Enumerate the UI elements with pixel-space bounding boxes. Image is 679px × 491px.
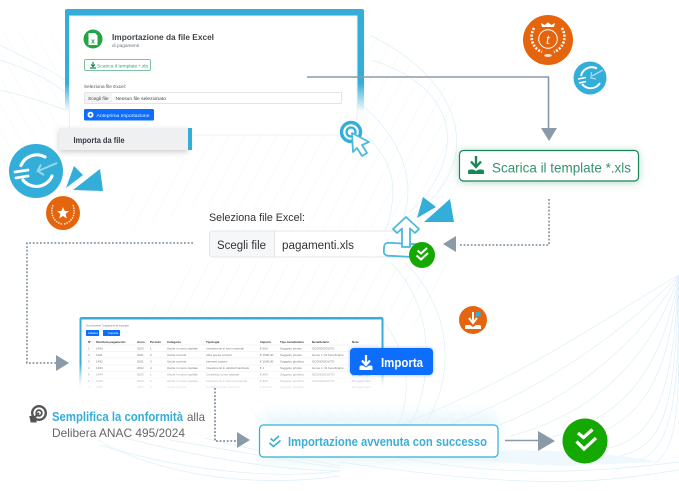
table contents: Soggetto giuridico	[280, 372, 304, 376]
arrow: dotted from download to file input	[443, 199, 549, 252]
icon: orange crest with t	[523, 15, 573, 65]
table contents: Soggetto giuridico	[280, 379, 304, 383]
table contents: Uscite correnti	[167, 385, 187, 389]
table contents: 4	[88, 366, 90, 370]
table contents: Soggetto privato	[280, 346, 302, 350]
table contents: Altre spese correnti	[206, 353, 232, 357]
table contents: Importa	[108, 331, 119, 335]
table contents: Beneficiario	[312, 340, 329, 344]
file input	[84, 92, 342, 104]
table contents: 1493	[96, 366, 103, 370]
table contents: 1495	[96, 379, 103, 383]
table contents: € 900,00	[260, 385, 272, 389]
panel: Excel import screen	[65, 9, 364, 135]
table contents: 1494	[96, 372, 103, 376]
tab: Importa da file	[59, 128, 192, 150]
table contents: Home c. 01 beneficiario	[312, 366, 344, 370]
panel: payments table	[80, 317, 384, 395]
panel inner area	[70, 16, 357, 135]
icon: orange crest with t: t	[546, 32, 551, 48]
table contents: Soggetto giuridico	[280, 360, 304, 364]
icon: import	[360, 355, 372, 370]
button: preview import: Anteprima Importazione	[96, 113, 150, 119]
message: import successful	[260, 425, 498, 457]
button: Importa	[350, 348, 433, 375]
table contents: 5	[88, 372, 90, 376]
button: preview import	[84, 109, 154, 120]
table contents: Investimenti in beni materiali	[206, 346, 244, 350]
button: Importa: Importa	[381, 355, 424, 370]
icon: euro with arrow	[9, 144, 63, 198]
table contents: 7	[88, 385, 90, 389]
table contents: Tipologia	[206, 340, 220, 344]
table contents: Periodo	[150, 340, 161, 344]
table contents: Uscite correnti	[167, 360, 187, 364]
icon: small euro badge	[574, 62, 606, 94]
icon: click cursor	[342, 122, 369, 156]
table contents: 2020	[137, 346, 144, 350]
table contents: Uscite in conto capitale	[167, 346, 198, 350]
message: import successful: Importazione avvenuta con successo	[288, 435, 487, 449]
tab: Importa da file: Importa da file	[74, 135, 125, 145]
table contents: Da aggiornare	[352, 372, 371, 376]
table contents: Sono presenti 7 pagamenti da importare	[86, 324, 129, 328]
table contents: 1	[150, 346, 152, 350]
table contents: Uscite in conto capitale	[167, 372, 198, 376]
panel contents	[84, 30, 342, 120]
table contents: Interessi passivi	[206, 360, 228, 364]
table contents: 2021	[137, 353, 144, 357]
label: Seleziona file Excel: Seleziona file Excel:	[209, 212, 305, 224]
icon: Excel file: x	[91, 38, 95, 46]
table contents: 2	[150, 379, 152, 383]
table contents: 2023	[137, 372, 144, 376]
icon: green check small	[409, 242, 435, 268]
table contents: 6	[88, 379, 90, 383]
table contents: € 1000,00	[260, 360, 274, 364]
table contents: SCONOSCIUTO	[312, 372, 335, 376]
table contents: Importo	[260, 340, 271, 344]
icon: blue triangles upload	[417, 197, 454, 222]
table contents: 3	[150, 360, 152, 364]
arrow: panel to download button	[307, 77, 557, 141]
table contents: Indietro	[88, 331, 98, 335]
table contents: 3	[150, 385, 152, 389]
table contents: Contributo conto capitale	[206, 372, 240, 376]
table contents: 1	[150, 372, 152, 376]
table contents: 4	[150, 366, 152, 370]
table contents: Anno	[137, 340, 145, 344]
icon: target arrow	[30, 406, 46, 422]
table contents: Uscite in conto capitale	[167, 366, 198, 370]
icon: upload arrow	[384, 217, 422, 257]
table contents: 2022	[137, 366, 144, 370]
table contents: 1491	[96, 353, 103, 357]
table contents: Note	[352, 340, 359, 344]
icon: download	[468, 156, 484, 174]
table contents: Uscite in conto capitale	[167, 379, 198, 383]
text block: simplifies compliance	[30, 406, 205, 440]
table contents: 1496	[96, 385, 103, 389]
panel frame	[80, 317, 384, 388]
file input: Scegli file	[88, 96, 109, 102]
arrow: to success icon	[505, 431, 555, 451]
table contents: 2	[88, 353, 90, 357]
icon: orange crest with star	[46, 196, 80, 230]
table contents: SCONOSCIUTO	[312, 379, 335, 383]
text block: simplifies compliance: Semplifica la conformità	[52, 410, 183, 424]
table contents: Home c. 01 beneficiario	[312, 353, 344, 357]
arrow: dotted from table to success message	[215, 388, 250, 448]
table contents: € 400	[260, 379, 268, 383]
table contents: N°	[88, 340, 92, 344]
table contents: 2021	[137, 360, 144, 364]
icon: double check	[270, 436, 280, 446]
icon: orange download	[459, 306, 487, 334]
table contents: € 1	[260, 366, 265, 370]
table contents: 1	[88, 346, 90, 350]
table contents: Investimenti in attività finanziarie	[206, 366, 250, 370]
heading: Importazione da file Excel	[112, 32, 214, 42]
text block: simplifies compliance: Delibera ANAC 495/2024	[52, 426, 185, 440]
table contents	[86, 324, 378, 389]
table contents: Soggetto giuridico	[280, 385, 304, 389]
table contents: 2	[150, 353, 152, 357]
button: Scarica il template	[460, 150, 638, 181]
table contents: 2023	[137, 385, 144, 389]
table contents: Contributi conto esercizio	[206, 385, 240, 389]
icon: blue triangles left	[66, 166, 103, 191]
button: Scarica il template: Scarica il template *.xls	[492, 160, 631, 176]
table contents: Struttura pagamento	[96, 340, 126, 344]
table contents: 3	[88, 360, 90, 364]
file input: pagamenti.xls	[210, 231, 406, 257]
table contents: Investimenti in beni immateriali	[206, 379, 247, 383]
table contents: Da aggiornare	[352, 379, 371, 383]
table contents: SCONOSCIUTO	[312, 346, 335, 350]
table contents: 2023	[137, 379, 144, 383]
button: download template: Scarica il template *.xls	[97, 64, 149, 70]
table contents: Uscite correnti	[167, 353, 187, 357]
table contents: 1492	[96, 360, 103, 364]
table contents: Da aggiornare	[352, 385, 371, 389]
table contents: 1490	[96, 346, 103, 350]
table contents: € 500	[260, 372, 268, 376]
panel frame	[65, 9, 364, 112]
button: download template	[84, 60, 150, 70]
file input: pagamenti.xls: Scegli file	[217, 240, 266, 252]
label: select file: Seleziona file Excel:	[84, 84, 126, 89]
table contents: Soggetto privato	[280, 366, 302, 370]
arrow: dotted from file input to table	[27, 243, 193, 371]
table contents: € 1500,00	[260, 353, 274, 357]
table contents: € 500	[260, 346, 268, 350]
text block: simplifies compliance: alla	[187, 410, 205, 424]
table contents: Categoria	[167, 340, 181, 344]
table contents: SCONOSCIUTO	[312, 360, 335, 364]
table contents: Tipo beneficiario	[280, 340, 304, 344]
table contents: Soggetto privato	[280, 353, 302, 357]
subheading: di pagamenti	[112, 43, 139, 48]
file input: pagamenti.xls: pagamenti.xls	[282, 240, 354, 252]
icon: Excel file	[84, 30, 102, 48]
file input: Nessun file selezionato	[116, 96, 166, 102]
icon: green check large	[562, 418, 608, 464]
